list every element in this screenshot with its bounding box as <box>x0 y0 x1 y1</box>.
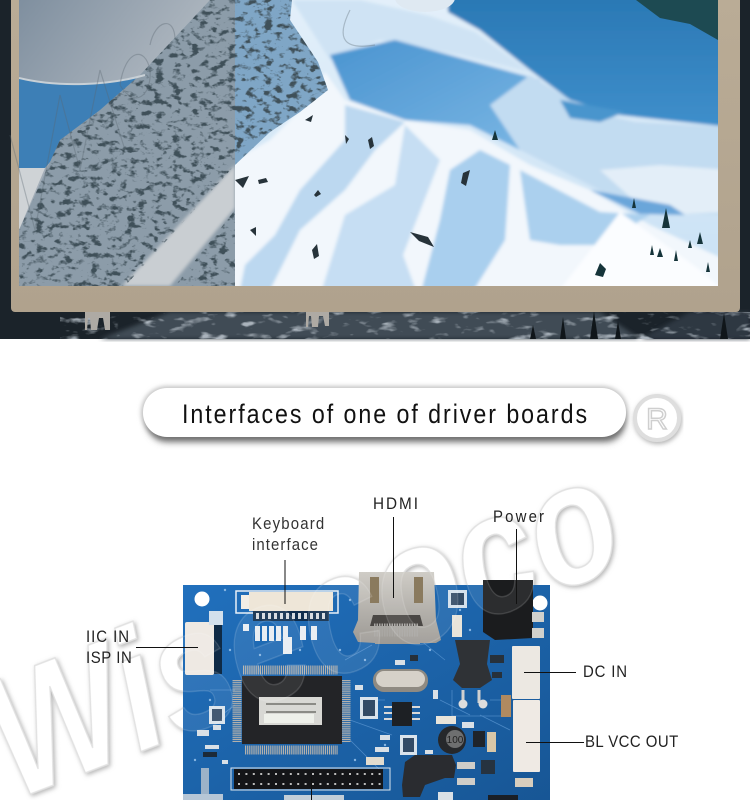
inductor 100 <box>438 726 485 754</box>
mounting holes <box>194 592 548 610</box>
label: keyboard interface: interface <box>252 536 318 554</box>
sky-blue back slope <box>448 0 730 127</box>
panel: faint watermark over photo <box>10 10 375 230</box>
label: hdmi: HDMI <box>373 494 418 513</box>
bl connector <box>513 700 540 772</box>
title: Interfaces of one of driver boards <box>182 399 587 429</box>
pin header <box>231 768 390 790</box>
upper snow shoulder <box>292 0 530 72</box>
main white ridge <box>225 72 730 296</box>
label: dc in: DC IN <box>583 663 627 681</box>
iic connector <box>185 622 222 675</box>
hdmi socket <box>353 572 441 644</box>
right snow field <box>490 76 718 197</box>
label: bl vcc out: BL VCC OUT <box>585 733 678 751</box>
panel: right half of screen, enhanced photo <box>225 0 730 296</box>
label: iic and isp in <box>86 628 198 667</box>
icon: registered mark: R <box>646 403 668 436</box>
rock specks on lower ridges <box>235 115 470 259</box>
rock strip <box>235 0 328 165</box>
small ic <box>384 702 420 726</box>
label: iic and isp in: IIC IN <box>86 628 129 646</box>
moon-shaped snow mound <box>446 0 455 8</box>
panel: driver board photo <box>183 572 550 800</box>
power jack <box>483 580 544 640</box>
pcb <box>183 585 550 800</box>
smd resistor blocks <box>183 590 533 800</box>
panel: left half of screen, unenhanced photo <box>19 0 235 286</box>
forest top right <box>636 0 718 40</box>
label: power: Power <box>493 508 545 526</box>
small conifers <box>492 130 710 277</box>
label: iic and isp in: ISP IN <box>86 649 132 667</box>
icon: left bracket tab <box>85 312 110 330</box>
blue shadows on lower faces <box>240 105 405 290</box>
label: dc in <box>524 663 627 681</box>
leader line: pin header <box>310 777 312 800</box>
label: keyboard interface: Keyboard <box>252 515 324 533</box>
dc connector <box>512 646 540 699</box>
icon: right bracket tab <box>306 312 329 327</box>
crystal <box>373 669 428 692</box>
keyboard connector <box>236 591 338 621</box>
panel: background mountain photo strip <box>0 0 750 339</box>
lower inductor <box>402 755 456 797</box>
top inductor <box>453 640 492 708</box>
panel: title pill <box>141 386 628 442</box>
panel: beige monitor frame <box>11 0 740 312</box>
label: hdmi <box>373 494 418 598</box>
inductor 100: 100 <box>447 735 464 746</box>
shaded central slope <box>330 40 540 150</box>
label: keyboard interface <box>252 515 324 604</box>
small parts under keyboard connector <box>243 624 317 654</box>
label: power <box>493 508 545 604</box>
main chip <box>237 670 346 750</box>
icon: registered mark <box>635 396 679 440</box>
traces and vias <box>210 640 510 770</box>
